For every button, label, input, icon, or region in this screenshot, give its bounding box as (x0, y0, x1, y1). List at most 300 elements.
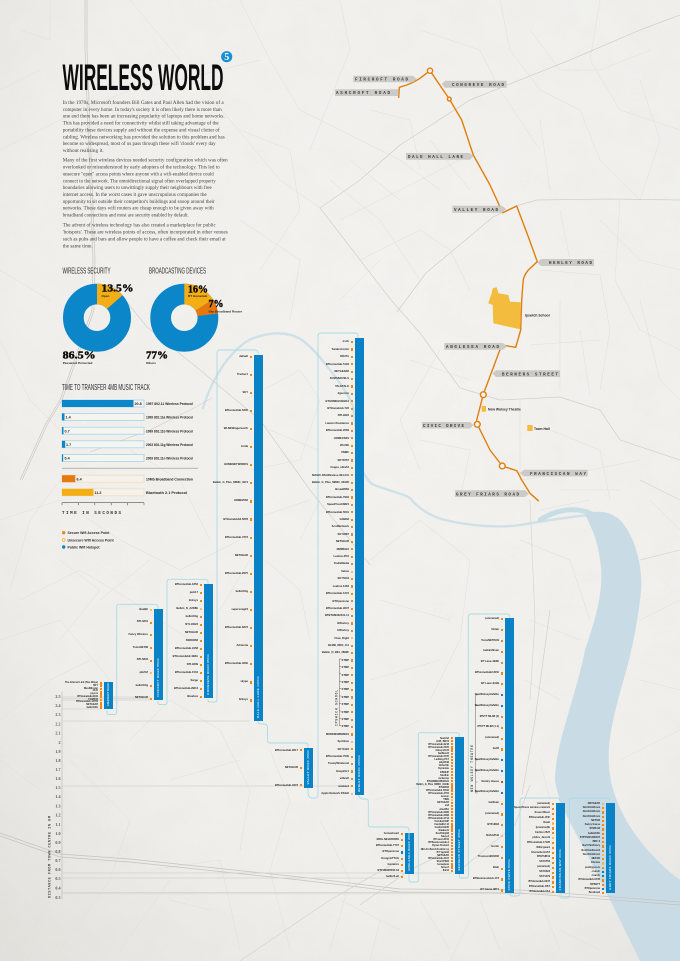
panel: Fircroft Road wifi column: TomsNET08 (133, 646, 148, 649)
panel: Dale Hall Lane wifi column: DALE HALL LANE 1300m (256, 676, 260, 718)
panel: Congreve Road wifi column: jack17 (190, 591, 198, 594)
panel: Civic Drive wifi column: Dentry House (482, 780, 499, 783)
panel: Dale Hall Lane wifi column: HOME2062 (234, 499, 248, 502)
panel: Civic Drive wifi column: bull2 (493, 747, 499, 750)
panel: Anglesea Road wifi column (376, 831, 414, 878)
river and estuary (203, 333, 680, 961)
panel: Grey Friars Road wifi column: NoriChinDoviz2 (581, 849, 600, 852)
panel: Civic Drive wifi column: BTBusinessHub-172 (473, 877, 499, 880)
distance axis: 0.6 (55, 867, 60, 872)
road labels: ANGLESEA ROAD (446, 346, 499, 350)
panel: Ashcroft Road wifi column: COMP32 (88, 698, 98, 701)
panel: Congreve Road wifi column: BTHomeHub-2BC3 (174, 687, 198, 690)
panel: Congreve Road wifi column: Sarge (191, 679, 198, 682)
panel: Dale Hall Lane wifi column: WLNEWingerworth (224, 427, 248, 430)
panel: Anglesea Road wifi column: BTFH6926530-18 (377, 869, 399, 872)
panel: Franciscan Way wifi column: (unnamed) (537, 865, 550, 868)
panel: Henley Road wifi column: BTBTHM332431-11 (325, 614, 349, 617)
panel: Henley Road wifi column: BTHomeHub-5031 (326, 511, 349, 514)
panel: Congreve Road wifi column (172, 583, 213, 698)
panel: Ashcroft Road wifi column: BTHomeHub-9182 (77, 695, 98, 698)
road labels: CONGREVE ROAD (452, 84, 504, 88)
panel: Berners Street wifi column: BTHomeHub-5025 (428, 746, 449, 749)
distance axis: 1.7 (55, 767, 60, 772)
intro text: This has provided a need for connectivity whilst still taking advantage of the (63, 120, 219, 127)
panel: Congreve Road wifi column: CONGREVE ROAD 950m (206, 654, 210, 695)
panel: Berners Street wifi column: TIMS (443, 798, 449, 801)
chart: transfer time bars: 1.7 (66, 443, 71, 447)
panel: Congreve Road wifi column: Belkin_N_A2D8E (176, 607, 198, 610)
distance axis: 2.5 (55, 694, 60, 699)
building: New Wolsey Theatre (482, 406, 521, 412)
panel: Anglesea Road wifi column: Gemarcs (387, 863, 399, 866)
distance axis: 1.2 (55, 812, 60, 818)
badge: issue number 5 (221, 51, 232, 63)
panel: Henley Road wifi column: HOMECN4S (334, 437, 349, 440)
panel: Congreve Road wifi column: Bluebox (187, 695, 198, 698)
chart: broadcasting devices donut: 16% (188, 284, 208, 296)
chart: transfer time bars: 2003 802.11g Wireless Protocol (146, 443, 193, 447)
panel: Dale Hall Lane wifi column: Adrienna (236, 644, 248, 647)
panel: Dale Hall Lane wifi column: Belkin_G_Plus_MIMO_4974 (213, 481, 248, 484)
chart: wireless security donut: 13.5% (102, 282, 134, 294)
panel: Berners Street wifi column: BTHomeHub-3098 (428, 814, 449, 817)
chart: broadcasting devices donut: Sky Broadband Router (208, 310, 243, 314)
panel: Berners Street wifi column: NETGEAR (437, 801, 449, 804)
panel: Dale Hall Lane wifi column: BTHomeHub-8372 (225, 626, 248, 629)
panel: Civic Drive wifi column: (unnamed) (485, 812, 499, 815)
chart: transfer time bars: 2009 802.11n Wireless Protocol (146, 457, 193, 461)
road labels: GREY FRIARS ROAD (456, 493, 519, 497)
panel: Grey Friars Road wifi column: pvtnbypos-b (585, 866, 600, 869)
panel: Ashcroft Road wifi column: WestMinster (84, 687, 98, 690)
distance axis: 2.1 (55, 730, 60, 736)
panel: Henley Road wifi column: BTHomeHub-5103 (326, 363, 349, 366)
panel: Henley Road wifi column: NETGEAR (336, 540, 349, 543)
panel: Henley Road wifi column: BTHomeHub-7994 (326, 496, 349, 499)
chart: transfer time bars: 1999 802.11b Wireless Protocol (146, 429, 193, 433)
panel: Henley Road wifi column: STMP (342, 696, 349, 699)
panel: Henley Road wifi column: SKY8767 (337, 459, 349, 462)
panel: Henley Road wifi column (312, 338, 364, 795)
panel: Civic Drive wifi column: NewWolseyCafeNo (475, 693, 499, 696)
panel: Henley Road wifi column: SKY5234 (337, 577, 349, 580)
panel: Grey Friars Road wifi column: NoriChinFancy (582, 844, 600, 847)
panel: Grey Friars Road wifi column: Fancy house (585, 823, 600, 826)
panel: Grey Friars Road wifi column: NoriChinDoviz (583, 815, 600, 818)
building: Town Hall (527, 425, 550, 431)
panel: Henley Road wifi column: Leebox-PC0 (333, 555, 349, 558)
legend: Public Wifi Hotspot (68, 545, 100, 549)
panel: Grey Friars Road wifi column: STPT3321298167 (580, 836, 600, 839)
panel: Civic Drive wifi column: IPSTT MLIM (1.1) (478, 725, 499, 728)
panel: Grey Friars Road wifi column: BRF-3 (593, 840, 600, 843)
panel: Henley Road wifi column: NTL9323 (338, 414, 349, 417)
panel: Grey Friars Road wifi column: BPSST7 (590, 883, 600, 886)
bracket: Ipswich School (334, 659, 341, 726)
distance axis: 1.8 (55, 758, 60, 763)
panel: Berners Street wifi column: Cardiolt1235 (435, 826, 449, 829)
panel: Franciscan Way wifi column: SKY8323 (539, 870, 550, 873)
intro text (63, 99, 228, 249)
panel: Berners Street wifi column: us8 (445, 804, 449, 807)
panel: Henley Road wifi column: BTOpenzone (332, 600, 349, 603)
panel: Grey Friars Road wifi column: NoriChinDoviz (583, 853, 600, 856)
panel: Berners Street wifi column (416, 737, 464, 874)
distance axis: 0.9 (55, 840, 60, 845)
road labels: DALE HALL LANE (408, 156, 463, 160)
panel: Grey Friars Road wifi column: crunch (592, 874, 600, 877)
panel: Congreve Road wifi column: SSID0283 (186, 639, 198, 642)
panel: Civic Drive wifi column: (unnamed) (485, 736, 499, 739)
heading: wireless security: WIRELESS SECURITY (62, 266, 111, 276)
road labels: FIRCROFT ROAD (355, 79, 408, 83)
panel: Congreve Road wifi column: BTHomeHub-1534 (175, 671, 198, 674)
panel: Henley Road wifi column: Flow_Right (335, 637, 349, 640)
panel: Anglesea Road wifi column: BTHomeHub-7737 (376, 844, 399, 847)
intro text: the same time. (63, 243, 93, 249)
chart: transfer time bars: 0.4 (64, 457, 71, 461)
road labels: FRANCISCAN WAY (530, 473, 586, 477)
panel: Henley Road wifi column: Cuppa_ultra54 (330, 466, 349, 469)
distance axis (55, 692, 62, 900)
distance axis: 2.3 (55, 712, 60, 717)
panel: Berners Street wifi column: fwatchd (440, 737, 449, 740)
panel: Henley Road wifi column: Broad2984 (335, 488, 349, 491)
panel: Henley Road wifi column: BWorksy (337, 622, 349, 625)
panel: Ashcroft Road wifi column: BTHomeHub-12784 (76, 700, 98, 703)
legend (62, 531, 114, 549)
panel: Henley Road wifi column: STMP (342, 666, 349, 669)
panel: Grey Friars Road wifi column: BTHomeHub-9735 (578, 878, 600, 881)
distance axis: 1.5 (55, 785, 60, 790)
panel: Henley Road wifi column: SpeedTouch8824 (327, 503, 349, 506)
panel: Grey Friars Road wifi column: NETGB (591, 819, 600, 822)
panel: Civic Drive wifi column: Iconin (491, 845, 499, 848)
panel: Henley Road wifi column: SarahsComm (332, 348, 349, 351)
panel: Dale Hall Lane wifi column: skype (240, 680, 248, 683)
intro text: computer in every home. In today's society it is often likely there is more than (63, 106, 222, 113)
panel: Grey Friars Road wifi column: STMP-93 (589, 827, 600, 830)
panel: Dale Hall Lane wifi column: default (239, 355, 248, 358)
road labels (335, 76, 594, 497)
chart: broadcasting devices donut: BT Homehub (188, 294, 207, 298)
panel: Henley Road wifi column: UNMC (341, 451, 349, 454)
panel: Franciscan Way wifi column (514, 802, 565, 893)
distance axis: 0.5 (55, 876, 60, 881)
panel: Anglesea Road wifi column: ANGLESEA ROAD 200m (407, 831, 411, 871)
chart: transfer time bars: Bluetooth 2.1 Protocol (146, 491, 187, 495)
panel: Berners Street wifi column: BTHomeHub-9218 (428, 743, 449, 746)
panel: Grey Friars Road wifi column: Chenas (591, 861, 600, 864)
intro text: connect to the network. The omnidirectional signal often overlapped property (63, 177, 216, 184)
panel: Henley Road wifi column: irvcb (343, 340, 349, 343)
intro text: without realising it. (63, 148, 104, 154)
chart: transfer time bars: 1997 802.11 Wireless Protocol (146, 402, 193, 406)
intro text: opportunity to sit outside their competitor's buildings and snoop around their (63, 199, 215, 205)
panel: Fircroft Road wifi column: NTL5843 (137, 658, 148, 661)
distance axis: 0.3 (55, 895, 60, 900)
panel: Berners Street wifi column: BTHomeHub-2197 (428, 857, 449, 860)
panel: Franciscan Way wifi column: BTHTHB19 (537, 855, 550, 858)
panel: Valley Road wifi column: VALLEY ROAD 150m (306, 750, 310, 785)
panel: Valley Road wifi column (275, 748, 313, 788)
panel: Valley Road wifi column: NETGEAR (285, 766, 298, 769)
panel: Ashcroft Road wifi column (65, 676, 113, 709)
panel: Civic Drive wifi column: CIVIC DRIVE 600m (507, 859, 511, 890)
panel: Henley Road wifi column: HENLEY ROAD 1500m (357, 755, 361, 792)
panel: Henley Road wifi column: STMP (342, 659, 349, 662)
panel: Henley Road wifi column: STMP (342, 718, 349, 721)
panel: Henley Road wifi column: DMM8191 (337, 548, 349, 551)
distance axis: 1.3 (55, 804, 60, 808)
panel: Ashcroft Road wifi column: The Internet Link (Two Ways) (65, 681, 98, 684)
panel: Berners Street wifi column: NETGEAR (437, 854, 449, 857)
panel: Dale Hall Lane wifi column: belkin54g (236, 590, 248, 593)
panel: Berners Street wifi column: BTHomeHub-2713 (428, 817, 449, 820)
road labels: VALLEY ROAD (454, 209, 498, 213)
panel: Henley Road wifi column: wackard (338, 785, 349, 788)
panel: Henley Road wifi column: STMP (342, 674, 349, 677)
panel: Dale Hall Lane wifi column: NETGEAR (235, 554, 248, 557)
panel: Congreve Road wifi column: linksys (189, 599, 198, 602)
panel: Civic Drive wifi column: NewWolseyCafeNo (475, 704, 499, 707)
panel: Ashcroft Road wifi column: NETGEAR (86, 703, 98, 706)
panel: Franciscan Way wifi column: SKY9753 (539, 860, 550, 863)
panel: Henley Road wifi column: DAVISNOVELS (330, 377, 349, 380)
panel: Henley Road wifi column: STMP (342, 681, 349, 684)
panel: Berners Street wifi column: Staabeck (438, 829, 449, 832)
panel: Berners Street wifi column: EB93JP (440, 771, 449, 774)
panel: Berners Street wifi column: Navy-8 (441, 835, 449, 838)
panel: Henley Road wifi column: dgserver (338, 392, 349, 395)
panel: Civic Drive wifi column: NewWolseyCafeNo (475, 758, 499, 761)
chart: wireless security donut (63, 282, 134, 365)
heading: time to transfer: TIME TO TRANSFER 4MB MUSIC TRACK (62, 382, 150, 392)
panel: Henley Road wifi column: SKY1923 (337, 748, 349, 751)
panel: Franciscan Way wifi column: BTHomeHub-9947 (528, 880, 550, 883)
panel: Fircroft Road wifi column: NETGEAR (135, 696, 148, 699)
panel: Fircroft Road wifi column: NTL3231 (137, 620, 148, 623)
panel: Civic Drive wifi column: belkin2Evan (483, 649, 499, 652)
scale guide lines (62, 697, 552, 894)
panel: Civic Drive wifi column: ThomsonE00236 (478, 855, 499, 858)
panel: Valley Road wifi column: BTHomeHub-0473 (275, 784, 298, 786)
chart: transfer time bars: 6.4 (76, 477, 83, 481)
intro text: cabling. Wireless networking has provided the solution to this problem and has (63, 134, 225, 140)
chart: broadcasting devices donut: Others (146, 361, 156, 365)
panel: Berners Street wifi column: Belkin_G_Plus_MIMO_3114E (416, 783, 449, 786)
panel: Henley Road wifi column: BTHomeHub-1272 (326, 592, 349, 595)
panel: Congreve Road wifi column: BTHomeHub2-4E8A (173, 655, 198, 658)
panel: Franciscan Way wifi column: Willd guard (536, 846, 550, 849)
chart: transfer time bars: 0.7 (64, 429, 70, 433)
panel: Fircroft Road wifi column: pHZ4Z (140, 671, 148, 674)
panel: Henley Road wifi column: HWorksy (337, 629, 349, 632)
panel: Berners Street wifi column: BTHomeHub2-1BA0 (426, 789, 449, 792)
panel: Henley Road wifi column: TALKTALK (335, 385, 349, 388)
chart: wireless security donut: Open (102, 294, 110, 298)
panel: Civic Drive wifi column (473, 617, 514, 893)
panel: Berners Street wifi column: HUB_BRT3 (436, 740, 449, 743)
intro text: Many of the first wireless devices needed security configuration which was often (63, 157, 228, 164)
panel: Henley Road wifi column: Belkin_N_B81_2899F (322, 651, 349, 654)
panel: Berners Street wifi column: Starfish (440, 774, 449, 777)
panel: Fircroft Road wifi column (128, 608, 163, 700)
panel: Henley Road wifi column: Belkin_G_Plus_MIMO_3334D (312, 481, 349, 484)
panel: Civic Drive wifi column: TomsNETKO9 (481, 639, 499, 642)
panel: Congreve Road wifi column: BTHomeHub-1852 (175, 583, 198, 586)
panel: Henley Road wifi column: Sprinkus (338, 740, 349, 743)
panel: Berners Street wifi column: NetBox24 (438, 752, 449, 755)
panel: Dale Hall Lane wifi column: BTHomeHub-3230 (225, 662, 248, 665)
panel: Fircroft Road wifi column: belkin54g (136, 684, 148, 687)
panel: Henley Road wifi column: Leebox-1284 (333, 585, 349, 588)
panel: Civic Drive wifi column: Blub (493, 866, 499, 869)
panel: Berners Street wifi column: ToshibaVOIP (434, 820, 449, 823)
panel: Congreve Road wifi column: NTL13023 (185, 623, 198, 626)
panel: Ashcroft Road wifi column: jaycox (91, 692, 98, 695)
chart: broadcasting devices donut: 7% (208, 298, 224, 310)
intro text: broadband connections and most are security enabled by default. (63, 212, 189, 218)
connector lines (107, 333, 610, 898)
panel: Henley Road wifi column: STMP (342, 711, 349, 714)
intro text: networks. These days wifi routers are cheap enough to be given away with (63, 205, 214, 212)
chart: transfer time bars: 1.4 (66, 416, 72, 420)
panel: Grey Friars Road wifi column: Bondswd (589, 891, 600, 894)
chart: wireless security donut: Password Protected (63, 361, 93, 365)
panel: Berners Street wifi column: Dynamite (438, 767, 449, 770)
panel: Ashcroft Road wifi column: SKY (93, 684, 98, 687)
axis label: distance from town centre: DISTANCE FROM TOWN CENTRE IN KM (48, 816, 52, 898)
panel: Henley Road wifi column: WL20E (340, 444, 349, 447)
panel: Dale Hall Lane wifi column: BTHomeHub-5335 (225, 409, 248, 412)
panel: Henley Road wifi column: MAGIC-DSLWireless-394-241 (312, 474, 349, 477)
chart: transfer time bars: 1999 802.11a Wireless Protocol (146, 416, 193, 420)
panel: Civic Drive wifi column: BTHomeHub2-KFE (475, 671, 499, 674)
panel: Henley Road wifi column: BTHomeHub-7030 (326, 755, 349, 758)
panel: Henley Road wifi column: Haspiritz1 (336, 770, 349, 773)
panel: Civic Drive wifi column: Nolan (492, 628, 499, 631)
panel: Berners Street wifi column: CardiatK2-12 (434, 823, 449, 826)
panel: Congreve Road wifi column: NTL9309 (187, 663, 198, 666)
panel: Berners Street wifi column: BTBusinessHub-2 (428, 841, 449, 844)
panel: Fircroft Road wifi column: BeeBE (139, 608, 148, 611)
panel: Anglesea Road wifi column: homecheart (384, 832, 399, 835)
panel: Dale Hall Lane wifi column: SKY (242, 391, 248, 394)
panel: Henley Road wifi column: STMP (342, 688, 349, 691)
panel: Grey Friars Road wifi column: crunch (592, 870, 600, 873)
building: Town Hall: Town Hall (534, 427, 550, 431)
panel: Anglesea Road wifi column: MOG-NEVADORE (377, 838, 399, 841)
legend: Unsecure Wifi Access Point (68, 538, 114, 542)
chart: wireless security donut: 86.5% (63, 350, 96, 362)
panel: Grey Friars Road wifi column: belkin54G (588, 832, 600, 835)
panel: Valley Road wifi column: BTHomeHub-9617 (275, 748, 298, 752)
panel: Henley Road wifi column: MODEM0M838091 (326, 733, 349, 736)
intro text: one and there has been an increasing popularity of laptops and home networks. (63, 113, 225, 120)
chart: transfer time bars (62, 400, 198, 496)
panel: Ashcroft Road wifi column: belkin54G (87, 706, 98, 709)
panel: Civic Drive wifi column: BT Lane-4B3E (481, 660, 499, 663)
intro text: internet access. In the worst cases it gave unscrupulous companies the (63, 192, 207, 198)
distance axis: 0.7 (55, 858, 60, 863)
panel: Civic Drive wifi column: BTFH693 (487, 823, 499, 826)
chart: transfer time bars: 20.8 (134, 402, 142, 406)
panel: Henley Road wifi column: BTHomeHub-723 (327, 407, 349, 410)
building: Ipswich School: Ipswich School (525, 314, 550, 318)
panel: Dale Hall Lane wifi column: BTHomeHub-7272 (225, 536, 248, 539)
panel: Henley Road wifi column: DD37A (340, 355, 349, 358)
distance axis: 2.2 (55, 722, 60, 726)
panel: Franciscan Way wifi column: BTHomeHub-17185 (527, 841, 550, 844)
panel: Berners Street wifi column: linksys0123 (436, 749, 449, 752)
panel: Civic Drive wifi column: IPSTT MLIM (1) (480, 714, 499, 718)
panel: Henley Road wifi column: Lawton Residence (325, 422, 349, 425)
intro text: become so widespread, most of us pass through these wifi 'clouds' every day (63, 140, 216, 147)
panel: Grey Friars Road wifi column (578, 802, 615, 894)
panel: Franciscan Way wifi column: SKY4479 (539, 875, 550, 878)
panel: Dale Hall Lane wifi column: Tracker1 (237, 373, 248, 376)
panel: Berners Street wifi column: Dynac-Firebird (432, 844, 449, 847)
panel: Franciscan Way wifi column: BTHomeHub-JFIF (529, 816, 550, 819)
distance axis: 0.4 (55, 886, 60, 890)
intro text: boundaries allowing users to unwittingly supply their neighbours with free (63, 184, 212, 191)
main overlay graphics: WIRELESS WORLD (62, 56, 224, 98)
panel: Berners Street wifi column: Sirius7 (441, 866, 449, 869)
distance axis: 1.0 (55, 831, 60, 836)
panel: Grey Friars Road wifi column: NETGEAR (588, 802, 600, 805)
panel: Civic Drive wifi column: NewWolseyCafeNo (475, 769, 499, 772)
panel: Henley Road wifi column: BLMB_8904_111 (328, 644, 349, 647)
chart axis: time in seconds: TIME IN SECONDS (62, 512, 121, 516)
panel: Berners Street wifi column: BTH6363 (439, 786, 449, 789)
bracket: Ipswich School: IPSWICH SCHOOL (334, 690, 338, 726)
panel: Henley Road wifi column: STMP (342, 703, 349, 706)
distance axis: 1.1 (55, 822, 60, 827)
panel: Franciscan Way wifi column: BTHomeHub-CBT (529, 885, 550, 888)
intro text: such as pubs and bars and allow people to have a coffee and check their email at (63, 235, 226, 242)
text: belkin5.ell (386, 875, 399, 878)
panel: Berners Street wifi column: Liebling-PC7 (434, 758, 449, 761)
panel: Henley Road wifi column: ToastyWireless6 (328, 762, 349, 765)
road labels: HENLEY ROAD (549, 262, 592, 266)
panel: Anglesea Road wifi column: DougsGTTAG (381, 857, 399, 860)
intro text: 'hotspots'. These are wireless points of access, often incorporated in other venues (63, 228, 228, 235)
road labels: BERNERS STREET (502, 373, 558, 377)
panel: Franciscan Way wifi column: FRANCISCAN WAY 300m (558, 849, 562, 890)
panel: Grey Friars Road wifi column: BTOpenzone (585, 887, 600, 890)
panel: Henley Road wifi column: OodleMedia (334, 562, 349, 565)
panel: Franciscan Way wifi column: Dewit (543, 821, 550, 824)
distance axis: 0.8 (55, 849, 60, 854)
panel: Berners Street wifi column: BT Vertical (437, 851, 449, 854)
intro text: The advent of wireless technology has also created a marketplace for public (63, 222, 216, 228)
panel: Berners Street wifi column: mckenzie (438, 777, 449, 780)
panel: Berners Street wifi column: skip6348 (439, 761, 449, 764)
panel: Grey Friars Road wifi column: NETAB (592, 857, 600, 860)
panel: Berners Street wifi column: BTHomeHub-4752 (428, 792, 449, 795)
panel: Dale Hall Lane wifi column: BTHomeHub2-5678 (223, 518, 248, 521)
distance axis: 2 (58, 740, 60, 745)
panel: Henley Road wifi column: Vebus (341, 570, 349, 573)
panel: Franciscan Way wifi column: Carlton 2527 (535, 831, 550, 834)
intro text: overlooked or misunderstood by early adopters of the technology. This led to (63, 164, 220, 171)
panel: Berners Street wifi column: Ordertbh (439, 764, 449, 767)
panel: Dale Hall Lane wifi column: HOMENETWORKS (224, 463, 248, 466)
panel: Dale Hall Lane wifi column: linksys (239, 698, 248, 701)
panel: Berners Street wifi column: BTHomeHub-5725 (428, 755, 449, 758)
